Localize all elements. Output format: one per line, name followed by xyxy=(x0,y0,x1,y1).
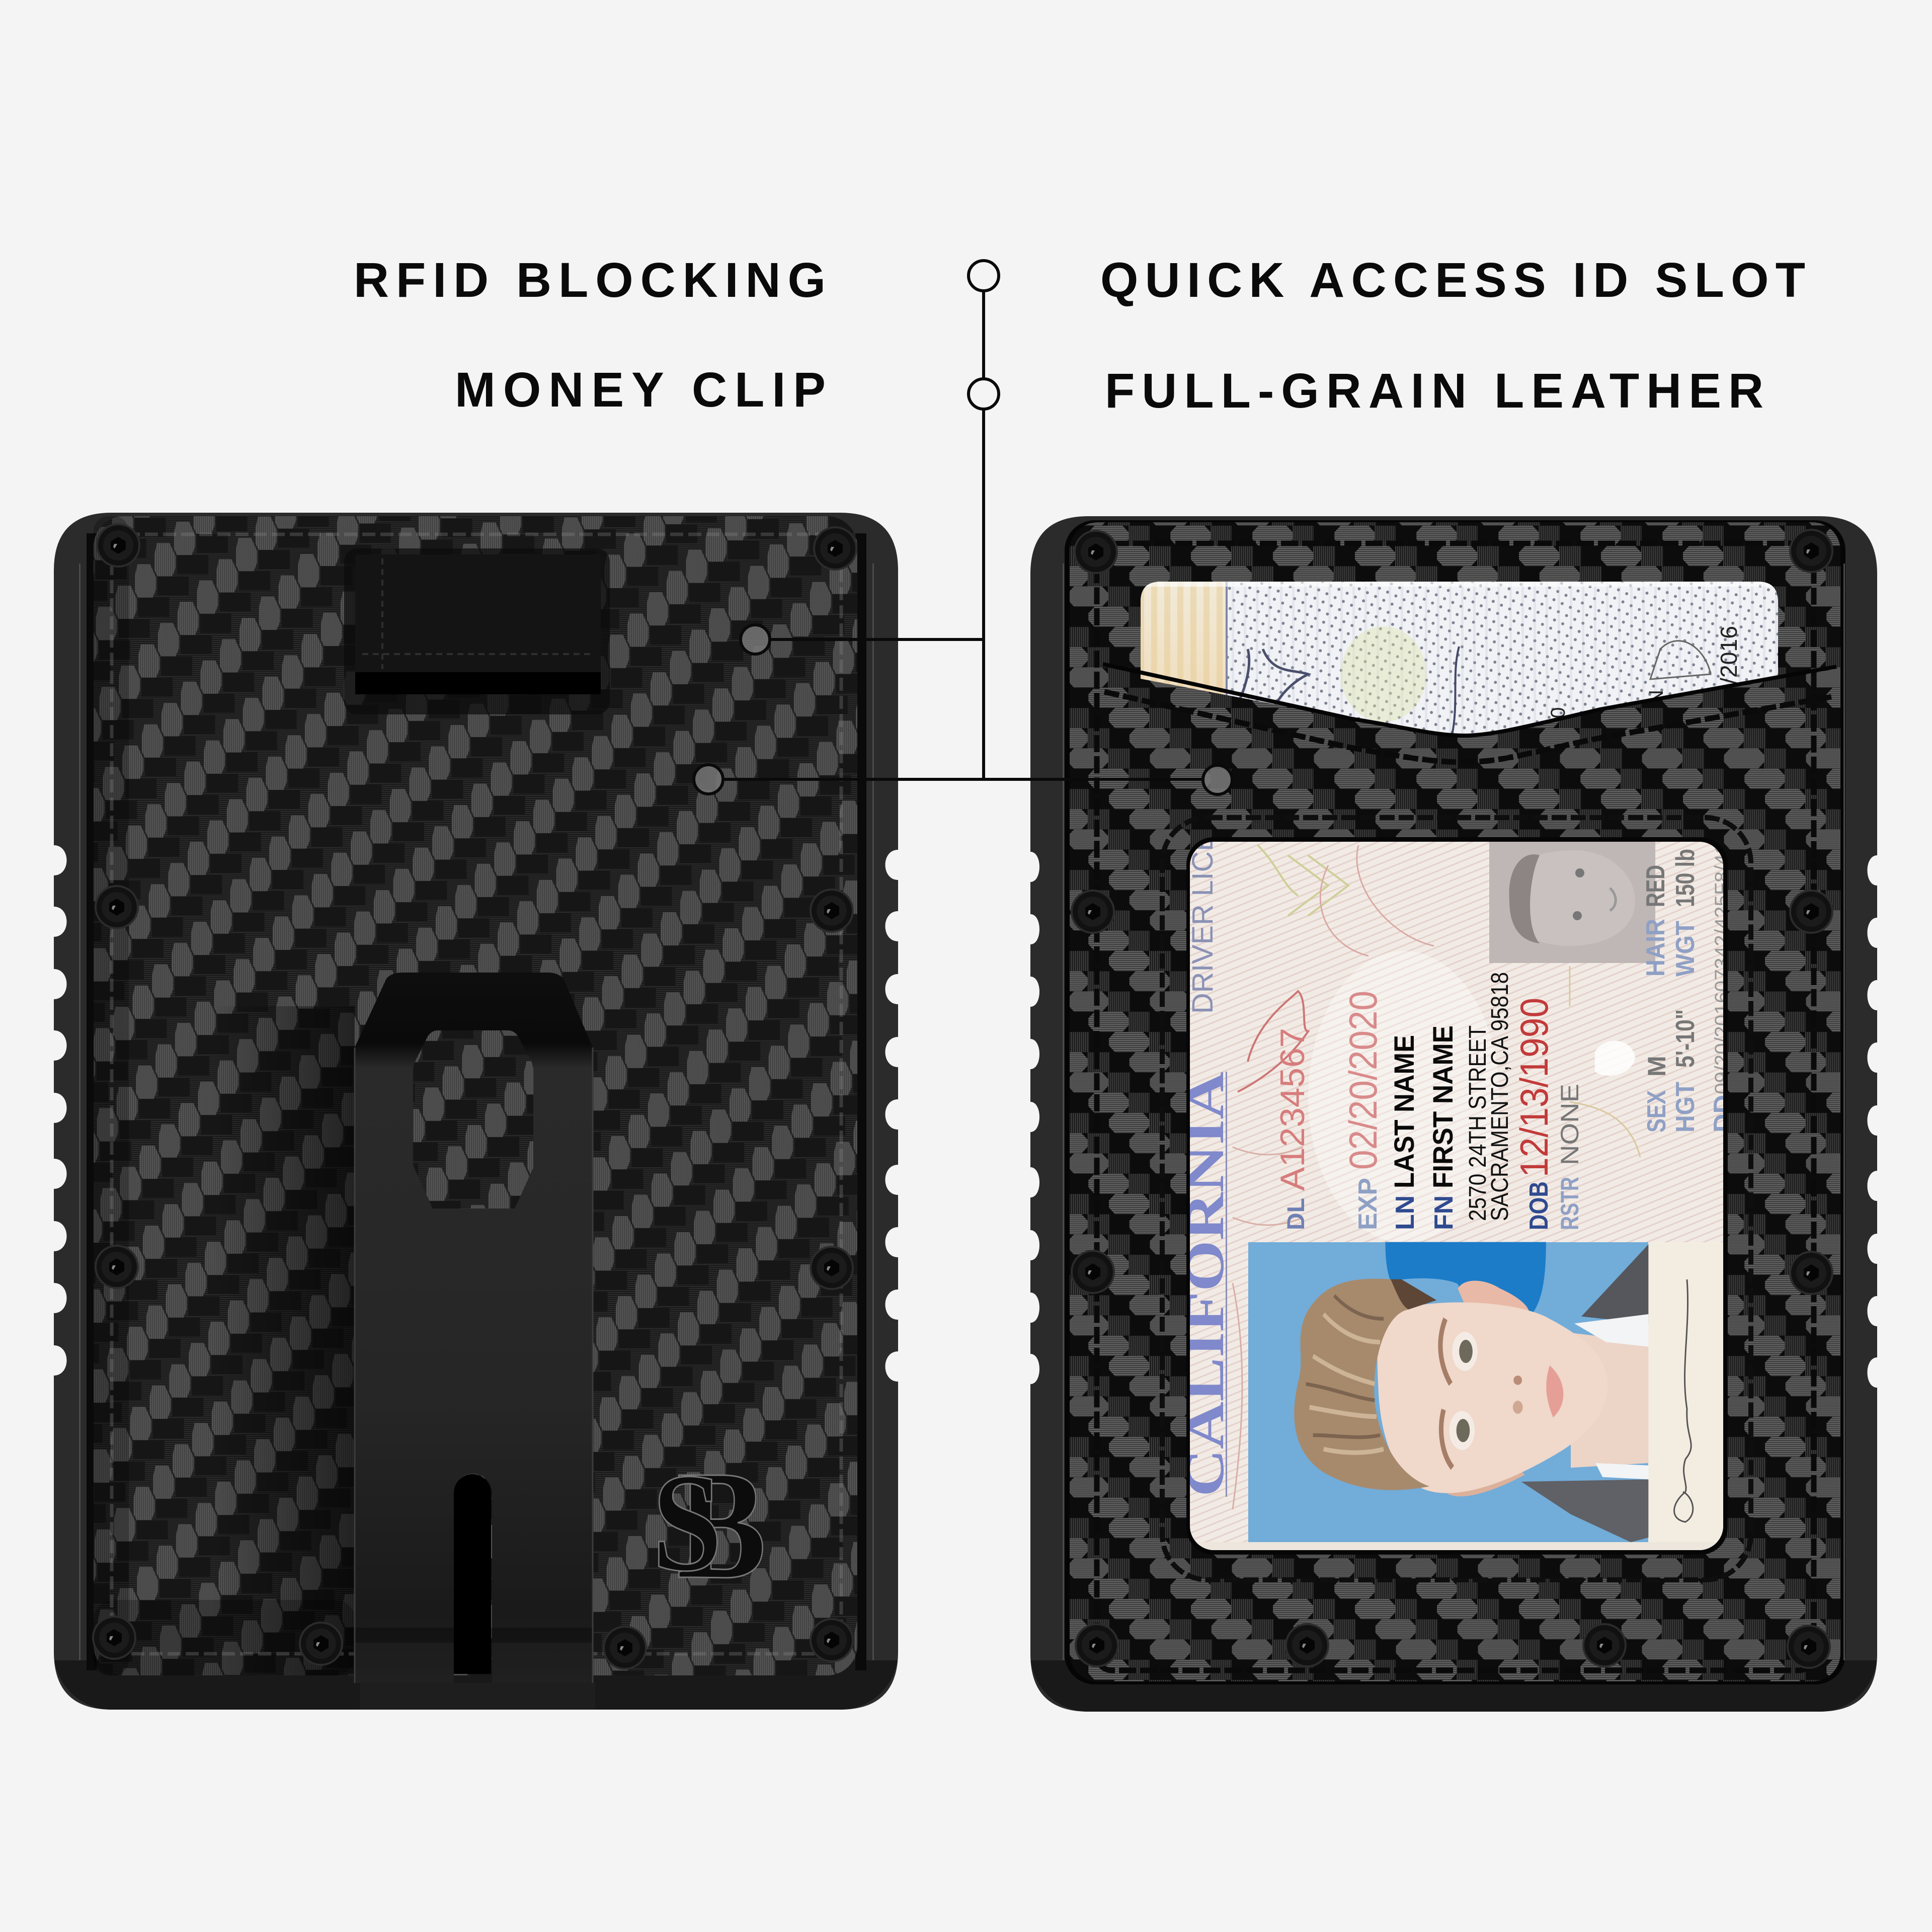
callout connector lines xyxy=(723,292,1202,779)
panel: front of wallet xyxy=(1030,516,1877,1712)
frame grooves xyxy=(1063,564,1845,1660)
top card: 90 xyxy=(1547,707,1569,730)
card date: /2016 xyxy=(1716,626,1742,684)
logo: SB monogram: S xyxy=(652,1444,722,1600)
label: full-grain leather: FULL-GRAIN LEATHER xyxy=(1105,363,1763,418)
face xyxy=(1378,1302,1608,1493)
jacket xyxy=(1581,1244,1648,1323)
license fields: RED xyxy=(1641,865,1670,907)
stitching xyxy=(112,534,841,1654)
license fields: SEX xyxy=(1642,1090,1671,1133)
license fields: NONE xyxy=(1556,1084,1584,1165)
neck xyxy=(1571,1333,1648,1468)
label: money clip: MONEY CLIP xyxy=(455,362,826,417)
legend dot: top xyxy=(969,261,999,291)
ghost portrait xyxy=(1489,842,1655,963)
license fields: 5'-10" xyxy=(1671,1009,1700,1068)
license fields: DD xyxy=(1709,1095,1738,1133)
top card: N xyxy=(1645,690,1667,704)
license fields: LAST NAME xyxy=(1388,1035,1420,1188)
license fields: HGT xyxy=(1671,1082,1700,1133)
signature xyxy=(1674,1279,1693,1522)
hair xyxy=(1294,1279,1429,1490)
eyes and brows xyxy=(1440,1319,1451,1384)
screws xyxy=(93,524,856,1669)
wallet back metal frame xyxy=(54,513,898,1710)
callout marker: money clip xyxy=(694,765,723,794)
license fields: WGT xyxy=(1671,921,1700,977)
bottom frame shade xyxy=(54,1660,898,1710)
window stitching xyxy=(1162,818,1751,1580)
label: quick access ID slot: QUICK ACCESS ID SLOT xyxy=(1100,253,1805,307)
license fields: DOB xyxy=(1524,1181,1554,1230)
hologram tint xyxy=(1386,1242,1546,1314)
bottom frame shade xyxy=(1030,1660,1877,1712)
frame grooves xyxy=(79,533,874,1670)
license fields: FN xyxy=(1429,1195,1459,1230)
top card xyxy=(1103,582,1836,743)
wallet front metal frame xyxy=(1030,516,1877,1712)
license fields: RSTR xyxy=(1556,1177,1584,1230)
license fields: 02/20/2020 xyxy=(1341,991,1385,1170)
card pull tab xyxy=(344,548,610,714)
license fields: EXP xyxy=(1353,1178,1383,1230)
pocket edge xyxy=(1103,664,1836,736)
callout marker: RFID blocking xyxy=(741,625,770,654)
nose and lips xyxy=(1513,1376,1522,1385)
money clip xyxy=(355,973,595,1710)
portrait photo xyxy=(1248,1242,1648,1542)
panel: back of wallet xyxy=(54,513,898,1710)
license fields: 2570 24TH STREET xyxy=(1465,1025,1491,1221)
license fields: FIRST NAME xyxy=(1427,1025,1459,1188)
license fields: 09/20/201607342/425F8/41 xyxy=(1711,843,1733,1094)
license fields: M xyxy=(1643,1056,1671,1077)
leather panel: carbon basket weave xyxy=(1065,520,1845,1684)
license guilloche map xyxy=(1238,991,1308,1092)
ID window: driver license xyxy=(1186,837,1728,1555)
callout marker: full-grain leather xyxy=(1203,765,1232,794)
license fields xyxy=(1273,843,1738,1230)
license fields: 150 lb xyxy=(1671,849,1700,907)
legend dot: second xyxy=(969,379,999,409)
state name: CALIFORNIA xyxy=(1175,1072,1235,1497)
license fields: A1234567 xyxy=(1273,1028,1312,1191)
leather panel: carbon twill xyxy=(94,516,857,1675)
pocket stitching xyxy=(1104,692,1831,762)
license fields: DL xyxy=(1283,1198,1310,1230)
license fields: SACRAMENTO,CA 95818 xyxy=(1487,972,1513,1221)
logo: SB monogram xyxy=(652,1439,766,1612)
ears xyxy=(1458,1280,1529,1314)
label: RFID blocking: RFID BLOCKING xyxy=(354,253,826,307)
license fields: HAIR xyxy=(1641,919,1670,977)
screws xyxy=(1072,530,1832,1668)
logo: SB monogram: B xyxy=(677,1439,766,1612)
license background xyxy=(1187,842,1726,1551)
license fields: LN xyxy=(1391,1195,1420,1230)
outer stitching xyxy=(1097,543,1814,1670)
license fields: 12/13/1990 xyxy=(1512,998,1556,1177)
shirt collar xyxy=(1574,1314,1648,1347)
driver license heading: DRIVER LICENSE xyxy=(1186,772,1219,1014)
